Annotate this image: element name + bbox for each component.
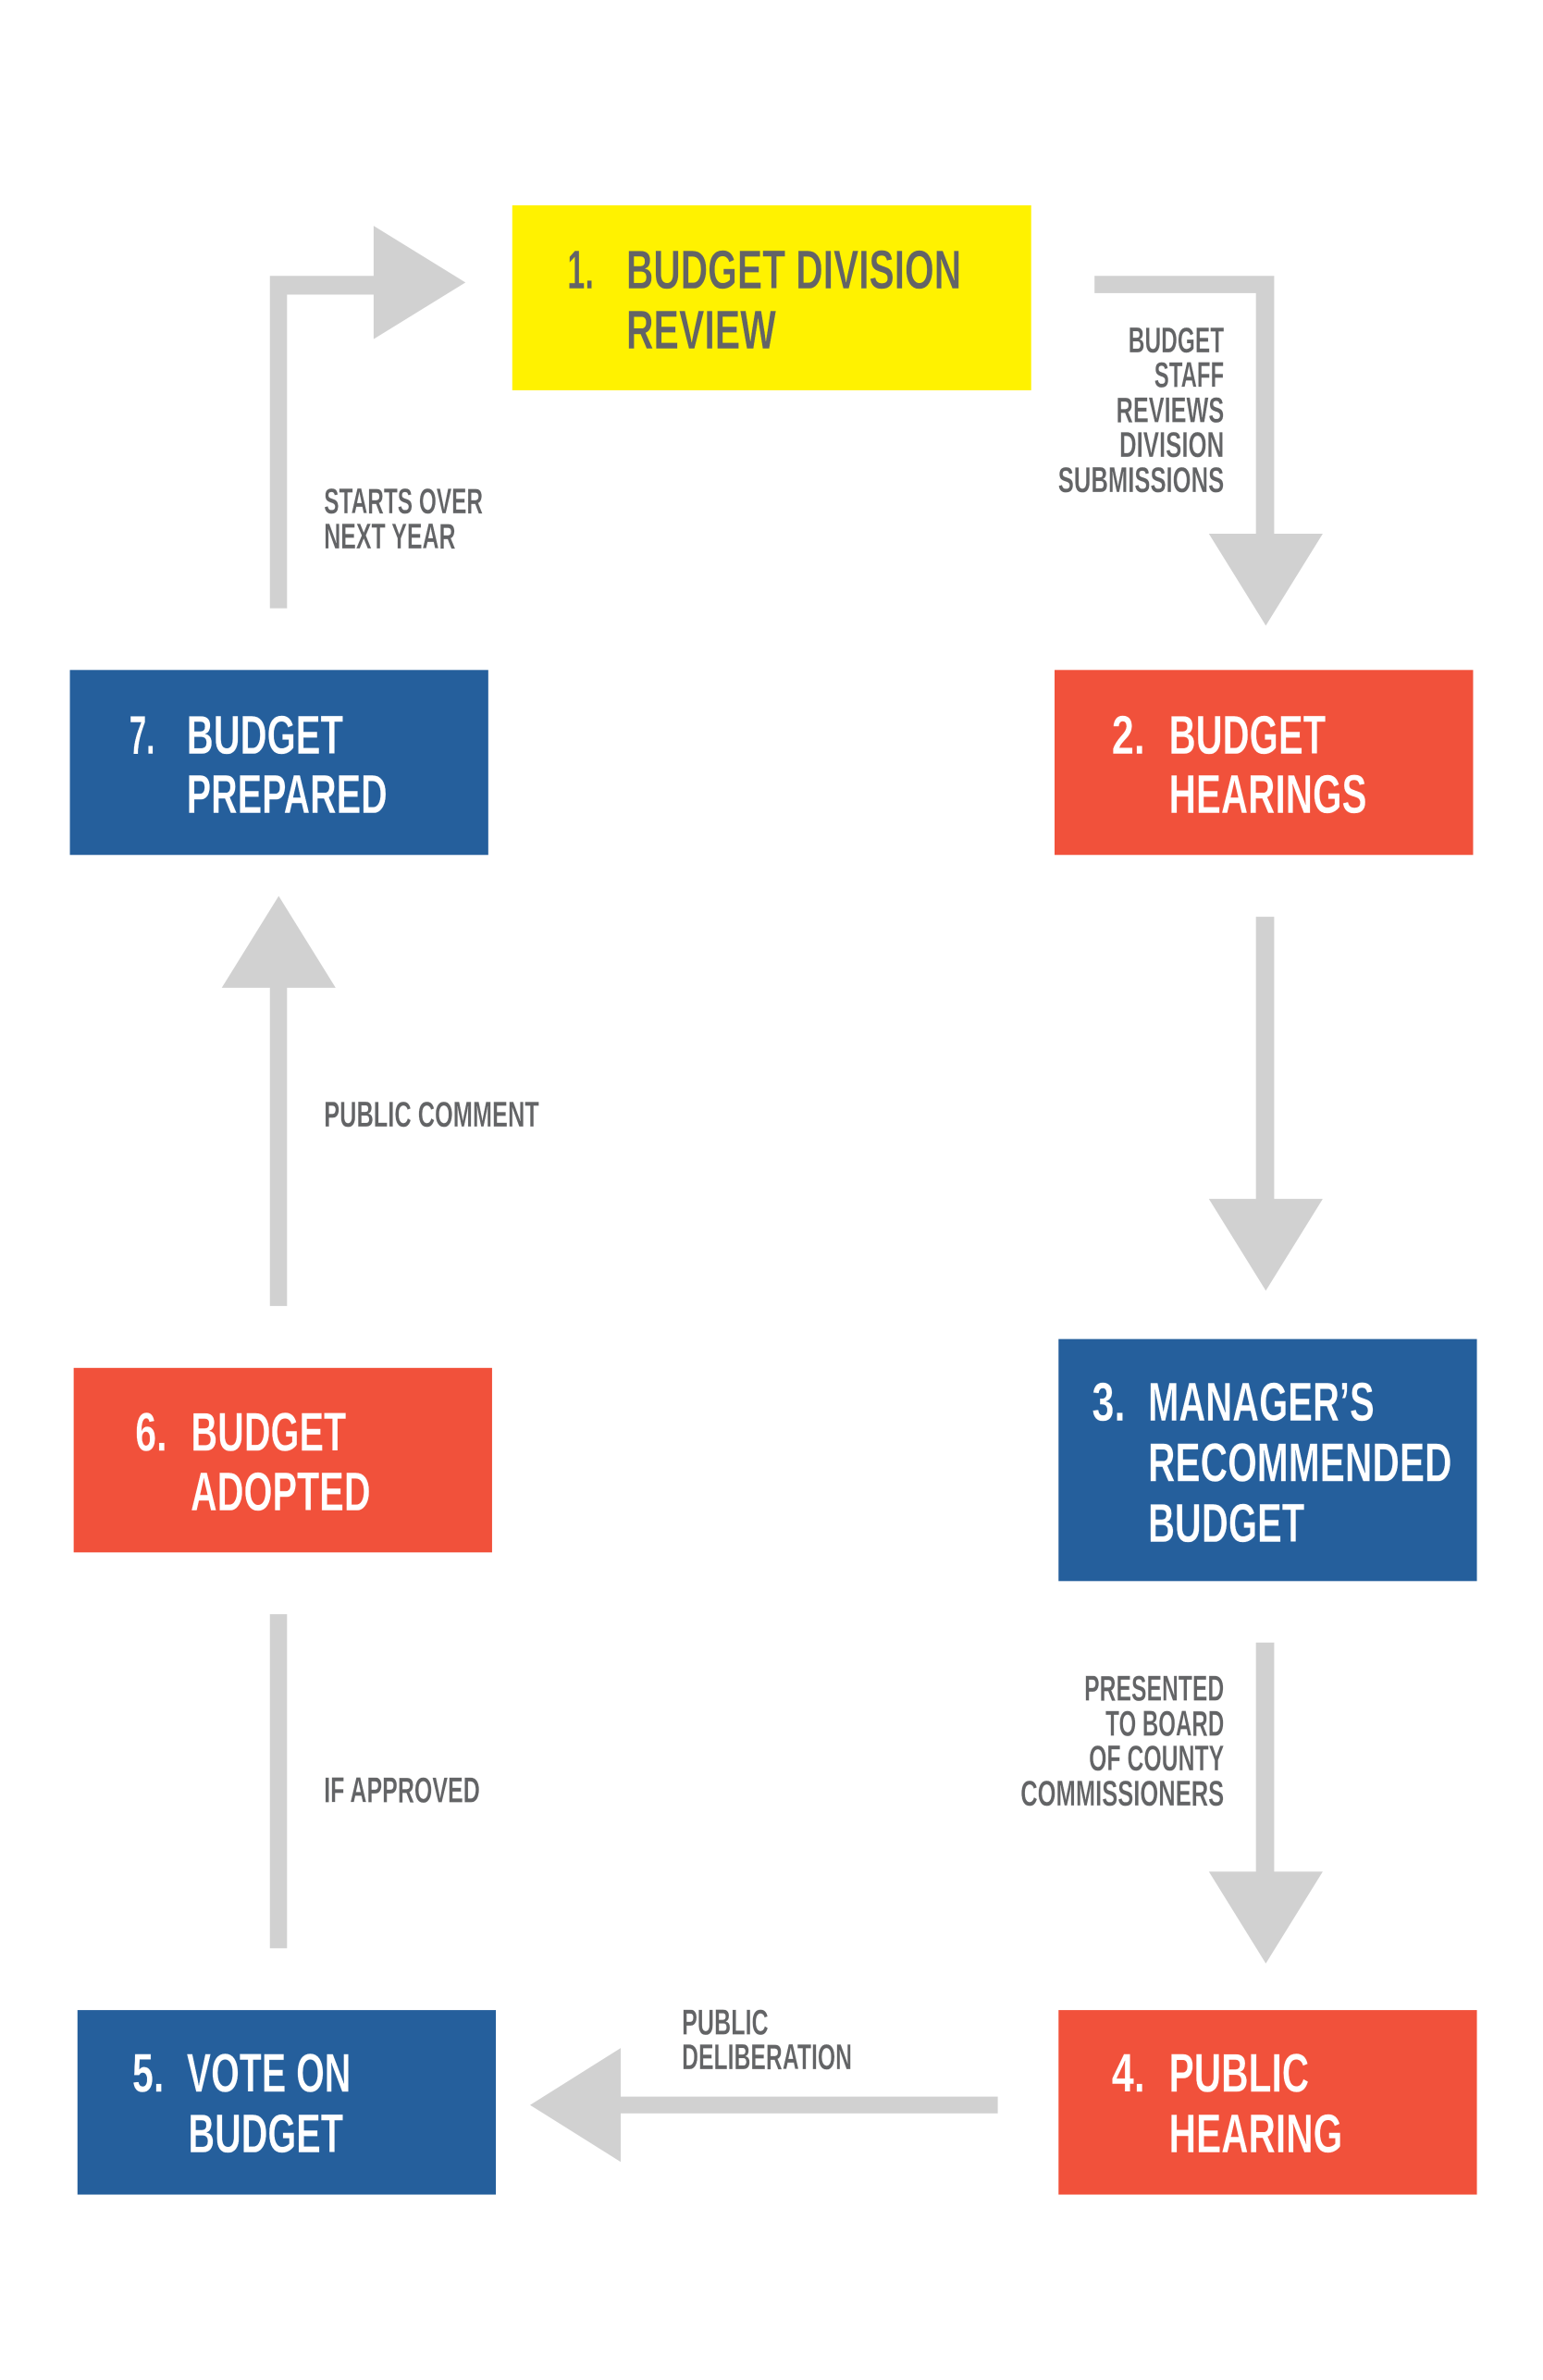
step 4: public hearing: 4. bbox=[1112, 2041, 1145, 2103]
step 6: budget adopted: 6. bbox=[135, 1401, 167, 1463]
label: public deliberation bbox=[682, 2003, 852, 2078]
step 3: manager's recommended budget: 3. bbox=[1092, 1371, 1126, 1433]
step 1: budget division review: 1. bbox=[567, 239, 594, 301]
step 5: vote on budget: BUDGET bbox=[188, 2103, 343, 2164]
step 7: budget prepared: BUDGET bbox=[187, 704, 343, 766]
step 7: budget prepared bbox=[70, 670, 488, 855]
step 5: vote on budget: 5. bbox=[132, 2041, 164, 2103]
label: budget staff reviews division submissions: DIVISION bbox=[1119, 425, 1224, 465]
arrow: step 2 to step 3 bbox=[1209, 917, 1323, 1290]
arrow: step 4 to step 5 bbox=[530, 2048, 998, 2162]
label: presented to board of county commissioners: TO BOARD bbox=[1105, 1704, 1224, 1744]
label: starts over next year: NEXT YEAR bbox=[324, 517, 456, 557]
step 2: budget hearings: 2. bbox=[1112, 704, 1145, 766]
step 5: vote on budget bbox=[78, 2010, 496, 2195]
step 5: vote on budget: VOTE ON bbox=[187, 2041, 351, 2103]
step 7: budget prepared: 7. bbox=[130, 704, 154, 766]
step 1: budget division review: REVIEW bbox=[626, 299, 776, 361]
arrow: step 6 to step 7 bbox=[222, 896, 336, 1306]
label: public comment: PUBLIC COMMENT bbox=[324, 1095, 539, 1135]
step 2: budget hearings: BUDGET bbox=[1169, 704, 1326, 766]
step 7: budget prepared: PREPARED bbox=[187, 763, 388, 825]
label: budget staff reviews division submissions: STAFF bbox=[1154, 356, 1224, 396]
label: budget staff reviews division submissions bbox=[1058, 321, 1224, 500]
step 6: budget adopted: BUDGET bbox=[191, 1401, 346, 1463]
step 3: manager's recommended budget bbox=[1058, 1339, 1477, 1581]
label: budget staff reviews division submissions: SUBMISSIONS bbox=[1058, 461, 1224, 500]
arrow: step 1 to step 2 bbox=[1094, 276, 1323, 625]
step 3: manager's recommended budget: BUDGET bbox=[1148, 1492, 1304, 1554]
step 6: budget adopted: ADOPTED bbox=[191, 1461, 371, 1523]
label: starts over next year: STARTS OVER bbox=[324, 482, 483, 522]
step 2: budget hearings bbox=[1055, 670, 1473, 855]
step 3: manager's recommended budget: MANAGER’S bbox=[1148, 1371, 1375, 1433]
label: presented to board of county commissioners bbox=[1020, 1670, 1224, 1814]
label: presented to board of county commissioners: COMMISSIONERS bbox=[1020, 1774, 1224, 1814]
label: presented to board of county commissioners: PRESENTED bbox=[1084, 1670, 1224, 1709]
step 6: budget adopted bbox=[74, 1368, 492, 1552]
arrow: step 7 back to step 1 bbox=[270, 226, 465, 609]
arrow: step 3 to step 4 bbox=[1209, 1643, 1323, 1964]
label: budget staff reviews division submissions: REVIEWS bbox=[1117, 390, 1224, 430]
label: budget staff reviews division submissions: BUDGET bbox=[1129, 321, 1224, 361]
step 1: budget division review bbox=[512, 205, 1031, 390]
step 2: budget hearings: HEARINGS bbox=[1169, 763, 1367, 825]
label: if approved: IF APPROVED bbox=[324, 1771, 480, 1811]
label: presented to board of county commissioners: OF COUNTY bbox=[1089, 1739, 1224, 1779]
label: public deliberation: PUBLIC bbox=[682, 2003, 769, 2042]
step 4: public hearing: PUBLIC bbox=[1169, 2041, 1309, 2103]
arrow: step 5 to step 6 bbox=[270, 1614, 287, 1948]
step 1: budget division review: BUDGET DIVISION bbox=[626, 239, 961, 301]
label: public deliberation: DELIBERATION bbox=[682, 2038, 852, 2078]
step 4: public hearing: HEARING bbox=[1169, 2103, 1342, 2164]
label: starts over next year bbox=[324, 482, 483, 557]
step 4: public hearing bbox=[1058, 2010, 1477, 2195]
